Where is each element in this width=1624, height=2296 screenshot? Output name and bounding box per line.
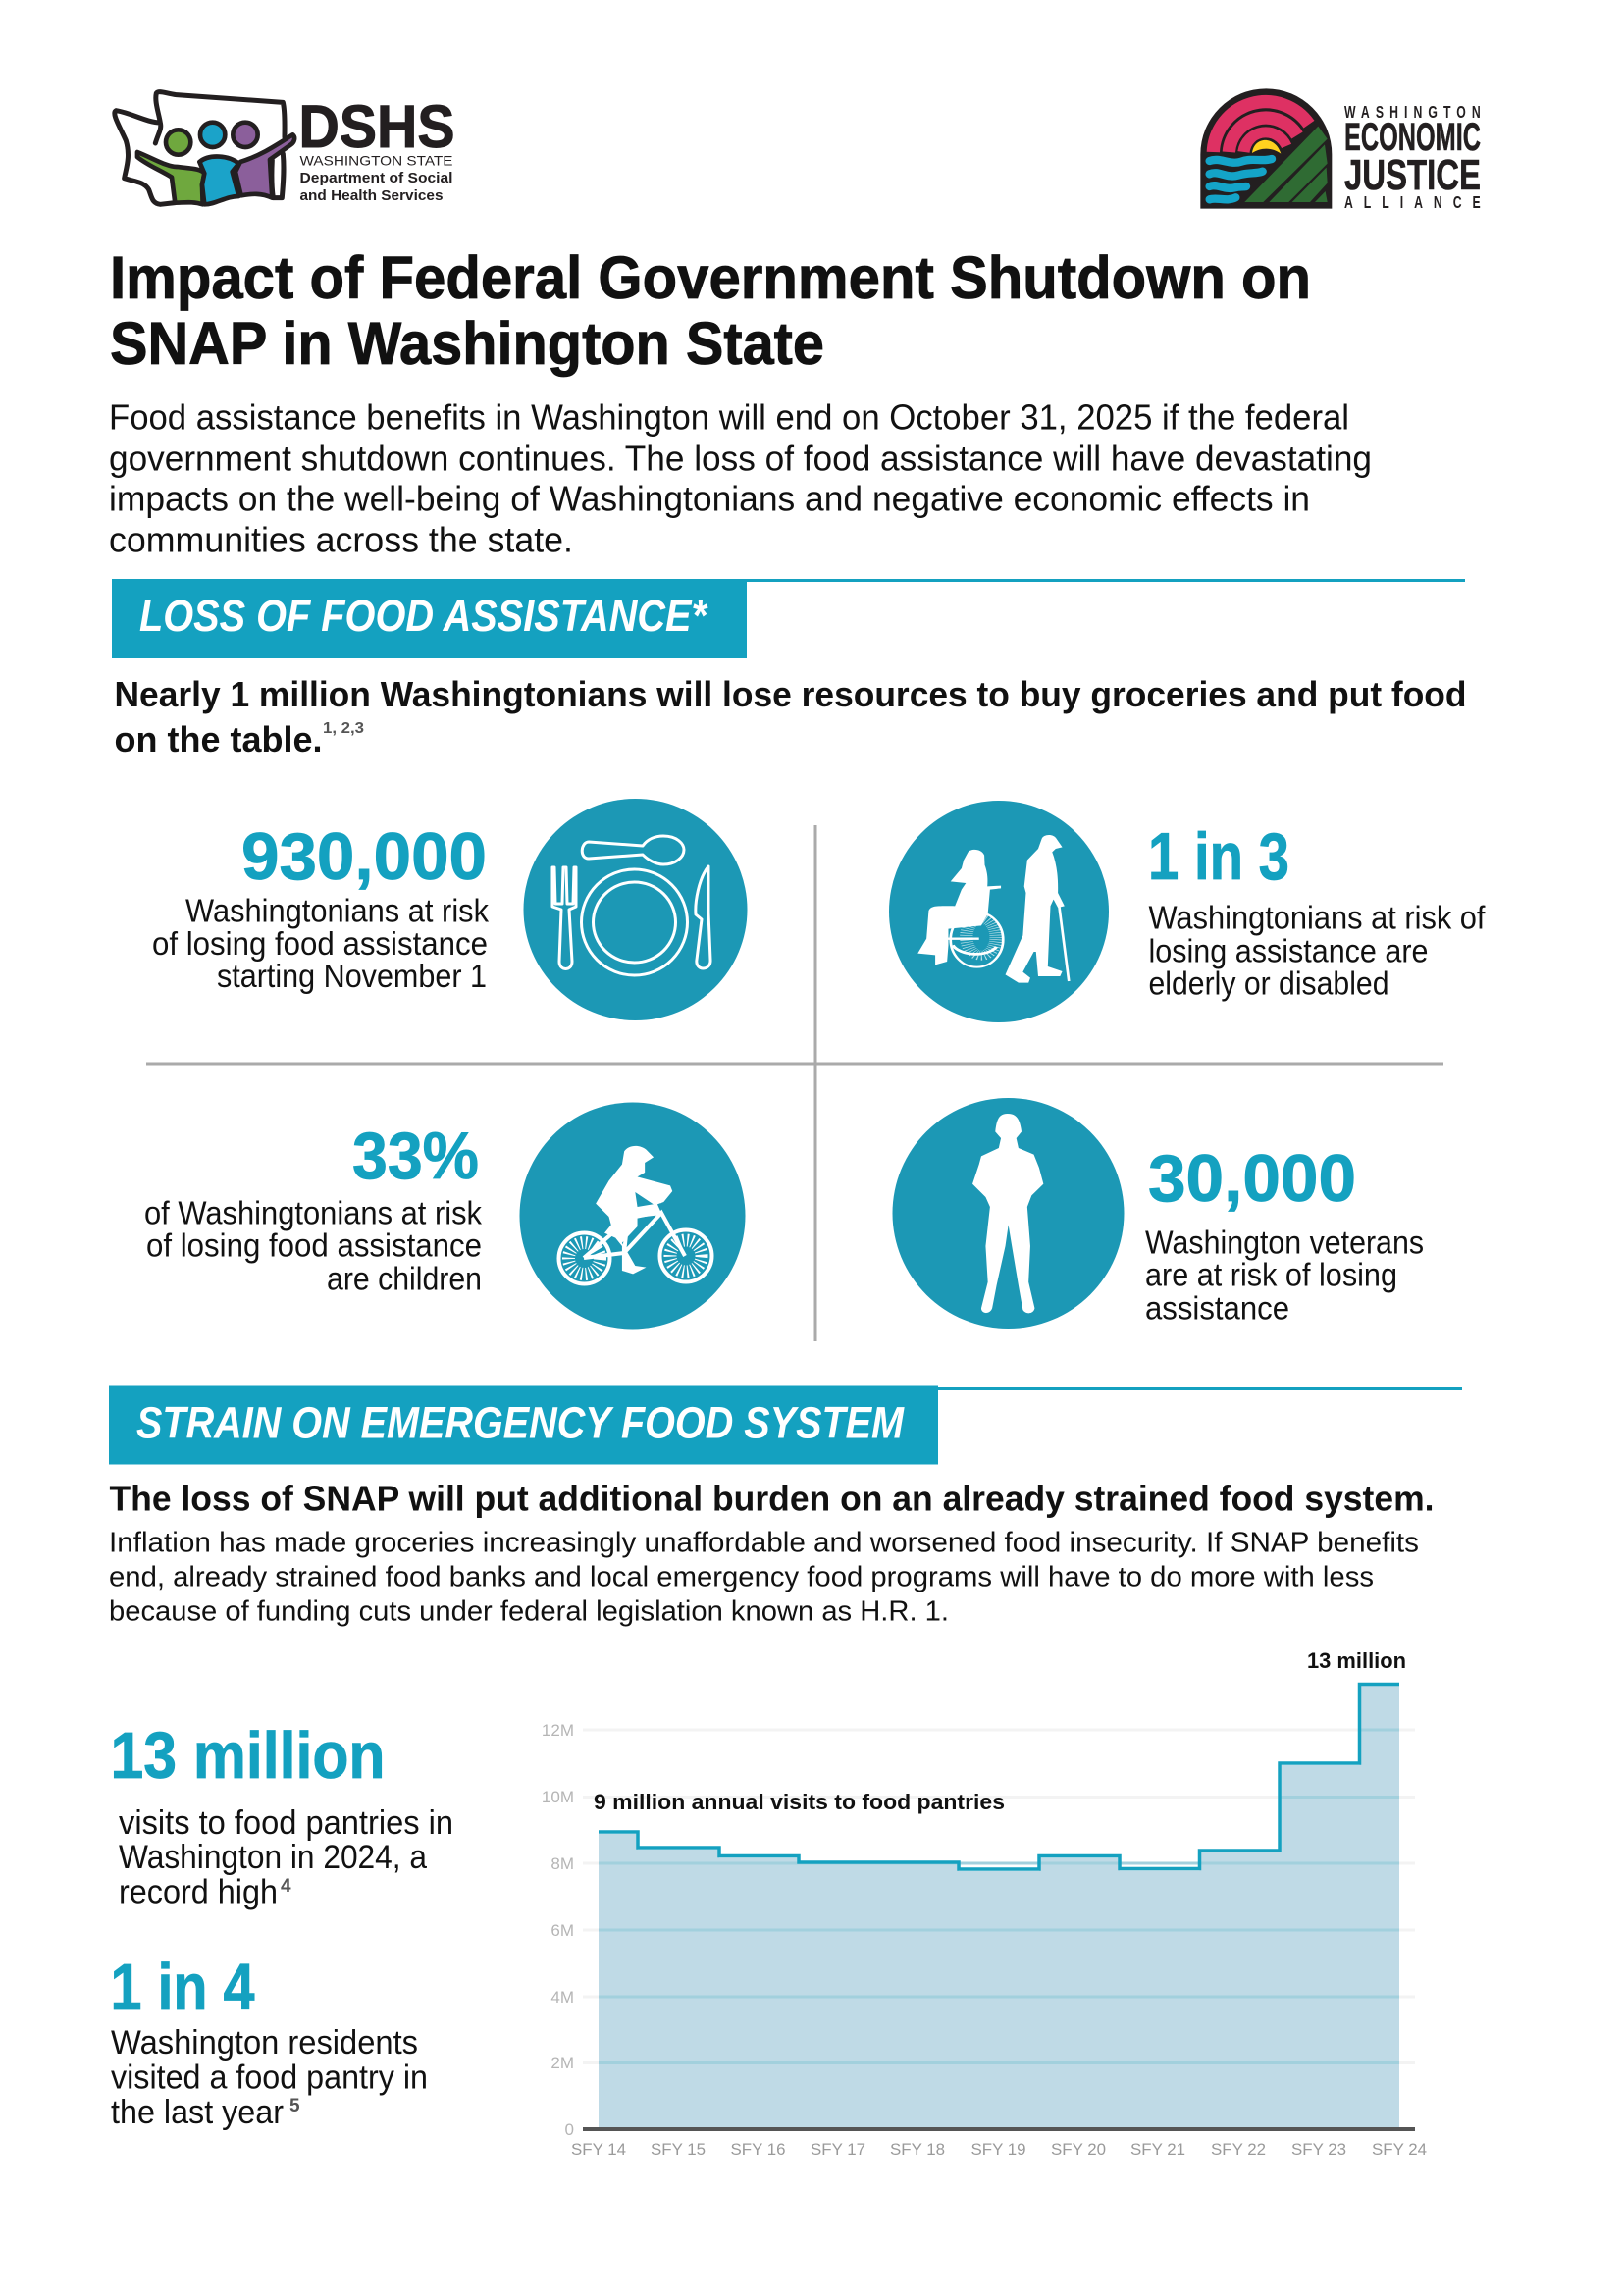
chart: annual visits to food pantries: SFY 17 [811, 2140, 865, 2159]
logo: DSHS [115, 92, 455, 204]
section header: loss of food assistance [112, 579, 1465, 658]
quadrant dividers [146, 825, 1443, 1341]
stat: 930,000: of losing food assistance [152, 925, 488, 962]
chart: annual visits to food pantries: 12M [542, 1721, 574, 1740]
stat: 1 in 3: Washingtonians at risk of [1148, 899, 1486, 936]
intro paragraph: Food assistance benefits in Washington will end on October 31, 2025 if the federal [109, 396, 1349, 438]
chart: annual visits to food pantries: SFY 24 [1372, 2140, 1427, 2159]
stat: 30,000: 30,000 [1148, 1141, 1356, 1216]
body paragraph: because of funding cuts under federal legislation known as H.R. 1. [109, 1595, 949, 1627]
stat: 1 in 4: visited a food pantry in [111, 2059, 428, 2096]
chart: annual visits to food pantries: SFY 21 [1130, 2140, 1185, 2159]
intro paragraph: impacts on the well-being of Washingtonians and negative economic effects in [109, 479, 1310, 518]
title: Impact of Federal Government Shutdown on [110, 244, 1311, 311]
intro paragraph [109, 396, 1372, 559]
chart: annual visits to food pantries: 10M [542, 1788, 574, 1806]
subheading: nearly 1 million: 1, 2,3 [323, 720, 364, 737]
text: DSHS wordmark: WASHINGTON STATE [300, 153, 453, 169]
chart: annual visits to food pantries: 0 [565, 2120, 574, 2139]
chart: annual visits to food pantries: 13 million [1307, 1648, 1406, 1673]
subheading: loss of SNAP burden: The loss of SNAP will put additional burden on an already strained food system. [110, 1478, 1435, 1519]
subheading: nearly 1 million: Nearly 1 million Washingtonians will lose resources to buy groceries and put food [114, 674, 1466, 714]
stat: 1 in 4 [110, 1951, 428, 2131]
stat: 13 million: visits to food pantries in [119, 1804, 453, 1842]
stat: 1 in 4: the last year [111, 2094, 284, 2131]
stat: 33%: 33% [352, 1119, 479, 1193]
stat: 33%: of losing food assistance [146, 1226, 482, 1264]
intro paragraph: communities across the state. [109, 520, 573, 559]
subheading: nearly 1 million: on the table. [114, 719, 322, 759]
body paragraph [109, 1527, 1419, 1627]
chart: annual visits to food pantries: SFY 18 [890, 2140, 945, 2159]
stat: 1 in 4: 5 [289, 2096, 300, 2116]
stat: 1 in 3: elderly or disabled [1148, 965, 1389, 1001]
chart: annual visits to food pantries: 9 million annual visits to food pantries [594, 1790, 1005, 1814]
stat: 930,000 [152, 819, 489, 994]
stat: 930,000: Washingtonians at risk [185, 893, 489, 928]
section header: strain on emergency food system: STRAIN ON EMERGENCY FOOD SYSTEM [136, 1397, 905, 1448]
stat: 33%: are children [327, 1260, 482, 1297]
icon: sun, waves and fields arch [1200, 88, 1332, 209]
stat: 13 million: record high [119, 1874, 278, 1911]
icon: veteran silhouette [893, 1098, 1125, 1329]
icon: Washington state outline with three figures [115, 92, 294, 204]
chart: annual visits to food pantries: SFY 19 [971, 2140, 1026, 2159]
chart: annual visits to food pantries: 6M [550, 1921, 574, 1940]
stat: 1 in 4: Washington residents [111, 2024, 418, 2061]
stat: 1 in 4: 1 in 4 [110, 1951, 255, 2024]
chart: annual visits to food pantries: SFY 14 [571, 2140, 626, 2159]
section header: loss of food assistance: LOSS OF FOOD ASSISTANCE* [139, 591, 708, 641]
stat: 13 million: 4 [281, 1876, 291, 1897]
stat: 33%: of Washingtonians at risk [144, 1195, 482, 1230]
stat: 30,000: are at risk of losing [1145, 1256, 1397, 1293]
stat: 1 in 3 [1148, 819, 1486, 1001]
text: alliance wordmark: ECONOMIC [1344, 116, 1481, 159]
text: alliance wordmark: JUSTICE [1344, 151, 1481, 199]
chart: annual visits to food pantries [542, 1648, 1427, 2159]
stat: 1 in 3: 1 in 3 [1148, 819, 1289, 894]
stat: 930,000: 930,000 [241, 819, 487, 894]
stat: 13 million: 13 million [110, 1719, 385, 1793]
stat: 30,000 [1145, 1141, 1424, 1327]
text: DSHS wordmark: DSHS [298, 93, 455, 160]
text: DSHS wordmark: and Health Services [300, 187, 444, 204]
chart: annual visits to food pantries: SFY 23 [1291, 2140, 1346, 2159]
stat: 33% [144, 1119, 482, 1297]
icon: wheelchair user and elder with cane [889, 801, 1109, 1022]
text: alliance wordmark: WASHINGTON [1344, 103, 1481, 123]
chart: annual visits to food pantries: SFY 20 [1051, 2140, 1106, 2159]
title [110, 244, 1311, 377]
chart: annual visits to food pantries: SFY 16 [730, 2140, 785, 2159]
title: SNAP in Washington State [110, 310, 824, 377]
body paragraph: Inflation has made groceries increasingly unaffordable and worsened food insecurity. If SNAP benefits [109, 1527, 1419, 1558]
stat: 930,000: starting November 1 [217, 958, 487, 994]
chart: annual visits to food pantries: 4M [550, 1988, 574, 2007]
stat: 13 million: Washington in 2024, a [119, 1839, 427, 1876]
intro paragraph: government shutdown continues. The loss of food assistance will have devastating [109, 438, 1372, 479]
chart: annual visits to food pantries: SFY 22 [1211, 2140, 1266, 2159]
logo: Washington Economic Justice Alliance [1200, 88, 1481, 213]
subheading: nearly 1 million [114, 674, 1466, 759]
stat: 1 in 3: losing assistance are [1148, 932, 1429, 969]
body paragraph: end, already strained food banks and local emergency food programs will have to do more with less [109, 1562, 1374, 1593]
stat: 30,000: assistance [1145, 1289, 1289, 1327]
stat: 13 million [110, 1719, 453, 1911]
text: alliance wordmark: ALLIANCE [1344, 193, 1481, 213]
text: alliance wordmark [1344, 103, 1481, 213]
section header: strain on emergency food system [109, 1385, 1462, 1464]
icon: child on bicycle [520, 1103, 746, 1329]
text: DSHS wordmark: Department of Social [300, 170, 453, 186]
text: DSHS wordmark [298, 93, 455, 204]
chart: annual visits to food pantries: 8M [550, 1854, 574, 1873]
stat: 30,000: Washington veterans [1145, 1225, 1424, 1260]
chart: annual visits to food pantries: 2M [550, 2054, 574, 2072]
icon: plate and cutlery [524, 799, 748, 1020]
chart: annual visits to food pantries: SFY 15 [651, 2140, 706, 2159]
